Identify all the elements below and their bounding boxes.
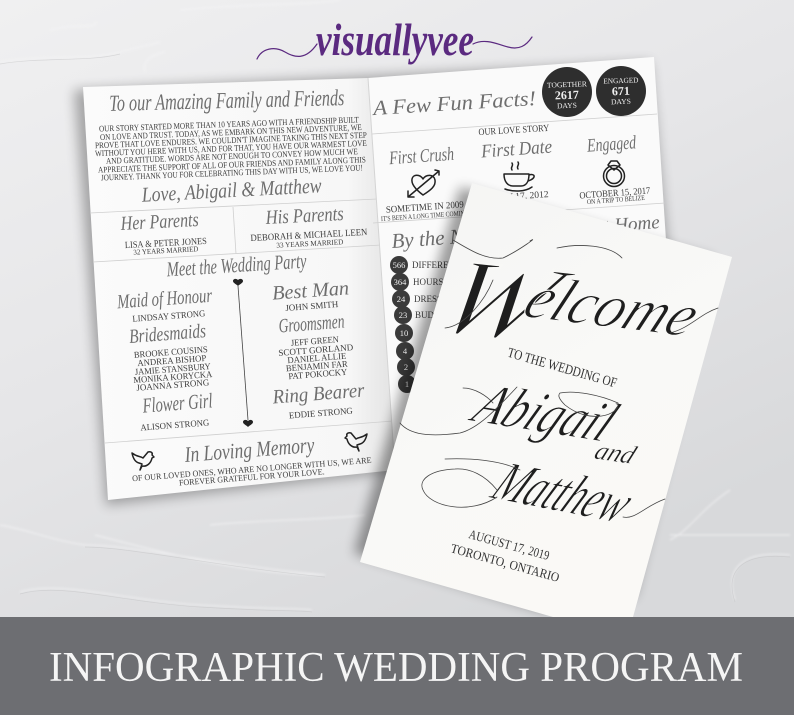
right column: groom's party	[271, 277, 365, 420]
first date milestone	[480, 137, 553, 204]
story paragraph: APPRECIATE THE SUPPORT OF ALL OF OUR FRIENDS AND FAMILY ALONG THIS	[98, 154, 366, 175]
left column: bride's party: MONIKA KORYCKA	[133, 369, 213, 385]
first date milestone: JULY 17, 2012	[491, 190, 549, 204]
left column: bride's party: LINDSAY STRONG	[132, 308, 206, 324]
left column: bride's party: ALISON STRONG	[140, 417, 210, 433]
story paragraph: OUR STORY STARTED MORE THAN 10 YEARS AGO WITH A FRIENDSHIP BUILT	[99, 114, 360, 134]
in loving memory section: OF OUR LOVED ONES, WHO ARE NO LONGER WITH US, WE ARE	[132, 455, 372, 483]
number list: 364	[394, 277, 407, 287]
subheading: our love story: OUR LOVE STORY	[478, 124, 550, 138]
partly hidden heading: by the numbers: By the Numbers	[391, 220, 526, 253]
heading: a few fun facts: A Few Fun Facts!	[370, 86, 537, 120]
left column: bride's party: Maid of Honour	[116, 285, 213, 313]
number list: 24	[397, 294, 406, 304]
front cover card	[360, 183, 732, 617]
story paragraph: AND GRATITUDE. WORDS ARE NOT ENOUGH TO CONVEY HOW MUCH WE	[106, 146, 358, 166]
bottom banner: INFOGRAPHIC WEDDING PROGRAM	[49, 645, 743, 691]
partly hidden heading: home: Sweet Home	[565, 212, 660, 240]
badge: engaged 671 days: ENGAGED	[603, 75, 639, 86]
heading: to our family and friends: To our Amazing Family and Friends	[109, 85, 345, 116]
engaged milestone	[579, 132, 651, 206]
his parents	[250, 203, 368, 250]
date and location	[449, 526, 561, 585]
his parents: 33 YEARS MARRIED	[276, 237, 344, 250]
number list: DIFFERENT	[412, 260, 461, 270]
first crush milestone: First Crush	[388, 144, 455, 169]
badge: together 2617 days: TOGETHER	[547, 79, 587, 90]
script: and: and	[590, 436, 642, 469]
right column: groom's party: SCOTT GORLAND	[278, 342, 354, 358]
story paragraph: JOURNEY. THANK YOU FOR CELEBRATING THIS DAY WITH US, WE LOVE YOU!	[101, 162, 363, 183]
left column: bride's party: JAMIE STANSBURY	[134, 361, 212, 377]
page shadow	[74, 62, 668, 505]
date and location: AUGUST 17, 2019	[467, 526, 551, 563]
number list: 10	[400, 328, 408, 338]
number list: BUDGET	[415, 310, 452, 320]
story paragraph: ON LOVE AND TRUST. TODAY, AS WE EMBARK ON THIS NEW ADVENTURE, WE	[100, 122, 362, 142]
number list: 2	[404, 362, 408, 372]
left column: bride's party: Flower Girl	[141, 388, 213, 418]
story paragraph: WITHOUT YOU HERE WITH US, AND FOR THAT, YOU HAVE OUR WARMEST LOVE	[95, 138, 367, 158]
bottom banner	[0, 617, 794, 715]
icon: tea cup	[504, 162, 534, 191]
number list: DRESSES	[414, 294, 453, 304]
open program: left page	[83, 78, 395, 500]
in loving memory section: In Loving Memory	[183, 432, 315, 467]
badge: engaged 671 days	[596, 66, 646, 116]
right column: groom's party: JEFF GREEN	[290, 334, 340, 348]
first crush milestone: IT'S BEEN A LONG TIME COMING	[381, 209, 469, 223]
script: Welcome: W	[416, 237, 591, 365]
right column: groom's party: BENJAMIN FAR	[285, 359, 348, 373]
right column: groom's party: Best Man	[271, 277, 350, 305]
badge: engaged 671 days: 671	[612, 84, 630, 98]
left column: bride's party: ANDREA BISHOP	[137, 353, 207, 368]
script: Abigail: Abigail	[460, 372, 629, 453]
right column: groom's party: Ring Bearer	[271, 380, 365, 409]
icon: dove left	[132, 452, 154, 470]
badge: together 2617 days: DAYS	[557, 101, 577, 110]
icon: dove right	[345, 433, 367, 451]
her parents: 32 YEARS MARRIED	[133, 244, 199, 257]
number list	[390, 256, 461, 393]
story paragraph	[95, 114, 367, 183]
first date milestone: First Date	[480, 137, 553, 163]
number list: 566	[393, 260, 405, 270]
heart divider line	[233, 279, 253, 427]
left column: bride's party: BROOKE COUSINS	[133, 344, 208, 360]
right column: groom's party: Groomsmen	[278, 311, 345, 338]
his parents: DEBORAH & MICHAEL LEEN	[250, 228, 368, 244]
number list: 4	[403, 346, 408, 356]
script: Abigail	[400, 372, 629, 453]
in loving memory section: FOREVER GRATEFUL FOR YOUR LOVE.	[179, 466, 325, 488]
engaged milestone: ON A TRIP TO BELIZE	[587, 194, 645, 206]
her parents	[119, 209, 207, 257]
script: Matthew	[422, 450, 665, 534]
script: Matthew: Matthew	[481, 450, 646, 534]
signature: Love, Abigail & Matthew	[140, 173, 322, 207]
number list: 1	[405, 379, 409, 389]
script: Welcome: elcome	[514, 263, 711, 349]
left column: bride's party: Bridesmaids	[128, 320, 207, 348]
date and location: TORONTO, ONTARIO	[449, 540, 561, 585]
right column: groom's party: DANIEL ALLIE	[287, 351, 347, 365]
her parents: Her Parents	[119, 209, 199, 235]
icon: heart with arrow	[408, 170, 439, 197]
her parents: LISA & PETER JONES	[125, 237, 207, 251]
in loving memory section	[132, 432, 372, 488]
number list: HOURS	[413, 277, 444, 287]
number list: 23	[399, 310, 407, 320]
badge: together 2617 days: 2617	[555, 88, 579, 102]
engaged milestone: OCTOBER 15, 2017	[579, 186, 651, 202]
story paragraph: PROVE THAT LOVE ENDURES. WE COULDN'T IMAGINE TAKING THIS NEXT STEP	[95, 130, 367, 150]
right column: groom's party: PAT POKOCKY	[288, 367, 348, 381]
left column: bride's party	[116, 285, 213, 433]
logo: visuallyvee: visuallyvee	[316, 14, 474, 65]
badge: together 2617 days	[542, 67, 592, 117]
front card shadow	[354, 187, 714, 611]
left column: bride's party: JOANNA STRONG	[136, 377, 210, 393]
first crush milestone	[381, 144, 469, 223]
heading: meet the wedding party: Meet the Wedding Party	[165, 249, 308, 281]
first crush milestone: SOMETIME IN 2009	[386, 200, 464, 216]
engaged milestone: Engaged	[586, 132, 637, 157]
right column: groom's party: JOHN SMITH	[285, 299, 339, 313]
open program: right page	[368, 57, 666, 470]
badge: engaged 671 days: DAYS	[611, 97, 631, 106]
line: to the wedding of: TO THE WEDDING OF	[506, 346, 619, 391]
icon: diamond ring	[604, 161, 624, 186]
right column: groom's party: EDDIE STRONG	[288, 406, 354, 420]
his parents: His Parents	[264, 203, 344, 229]
script: Welcome	[416, 237, 718, 365]
